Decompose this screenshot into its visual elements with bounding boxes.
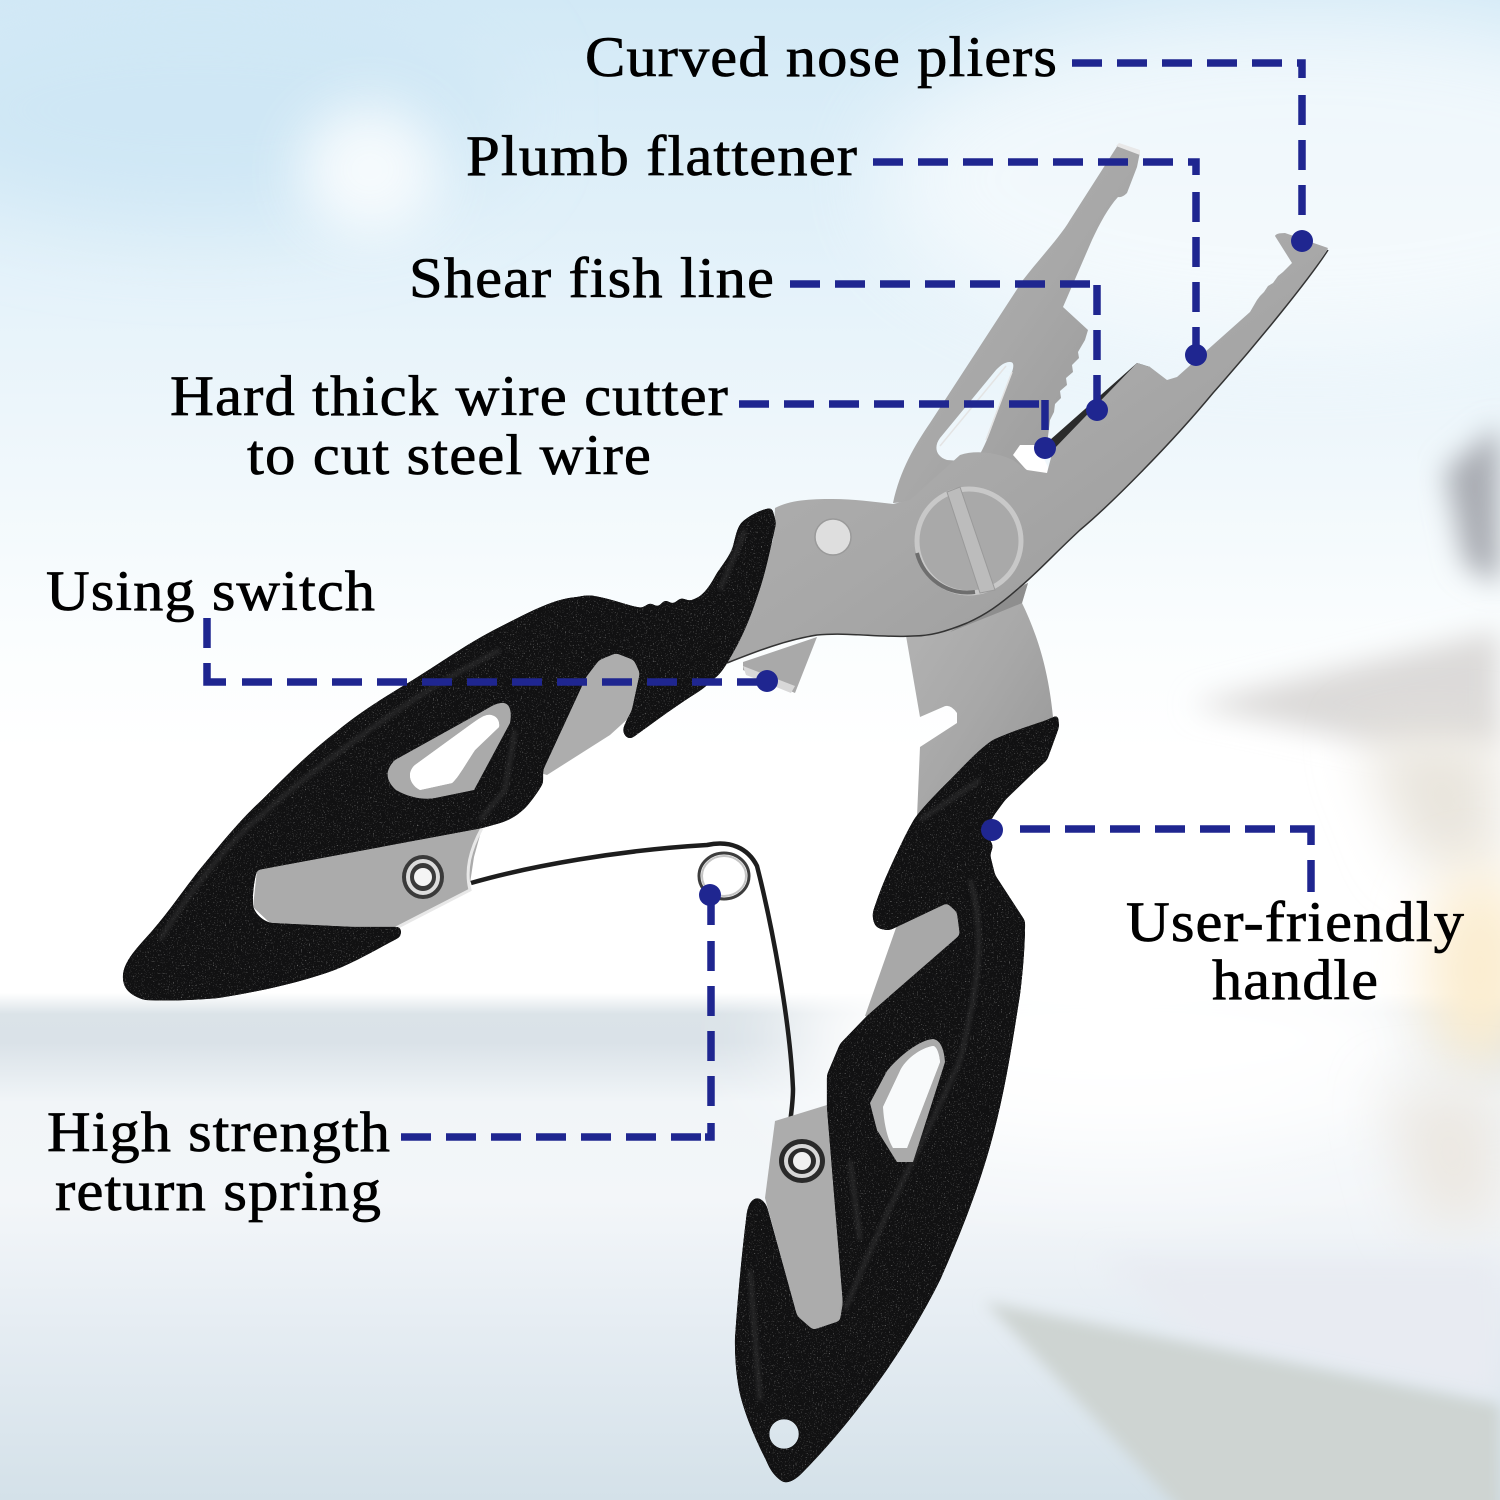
switch light edge xyxy=(743,666,795,693)
lower steel arm xyxy=(905,583,1053,817)
callout: High strength return spring: High strength xyxy=(47,1101,391,1164)
right handle grip highlights xyxy=(750,780,980,1400)
callout: Hard thick wire cutter: Hard thick wire cutter xyxy=(170,365,729,428)
hole highlight in upper jaw xyxy=(940,366,1012,446)
callout: User-friendly handle xyxy=(981,819,1465,1012)
callout: Hard thick wire cutter: to cut steel wire xyxy=(247,424,652,487)
right handle steel: mid section xyxy=(865,903,960,1020)
callout: Plumb flattener xyxy=(466,125,1207,366)
callout: Curved nose pliers: Curved nose pliers xyxy=(585,26,1058,89)
callout: Using switch: Using switch xyxy=(46,560,376,623)
small pivot gap xyxy=(1013,445,1048,474)
callout: User-friendly handle: handle xyxy=(1212,949,1379,1012)
lower steel shadow at pivot xyxy=(950,583,1028,632)
wire cutter dark blade xyxy=(1050,363,1150,455)
left handle rear steel xyxy=(253,828,482,929)
left handle rear steel light edge xyxy=(396,828,482,928)
left handle hole lining xyxy=(388,703,511,799)
callout: User-friendly handle: User-friendly xyxy=(1126,891,1465,954)
right handle xyxy=(735,715,1059,1482)
main blade lower dark edge xyxy=(727,250,1328,663)
right eyelet xyxy=(779,1139,825,1183)
callout: Plumb flattener: Plumb flattener xyxy=(466,125,858,188)
callout: Hard thick wire cutter xyxy=(170,365,1056,487)
callout: Shear fish line: Shear fish line xyxy=(409,247,775,310)
left handle grip highlights xyxy=(160,530,745,940)
right handle steel: lower section xyxy=(765,1105,843,1330)
switch slider xyxy=(743,637,817,693)
upper jaw tip highlight xyxy=(1116,143,1140,155)
right handle hole opening xyxy=(883,1046,940,1148)
main blade and left arm xyxy=(727,233,1328,663)
pivot screw xyxy=(917,487,1021,593)
rivet xyxy=(815,519,851,555)
left eyelet xyxy=(402,855,444,899)
right handle hole lining xyxy=(870,1039,945,1162)
left handle slot steel xyxy=(530,653,640,775)
callout: High strength return spring xyxy=(47,884,721,1223)
return spring xyxy=(471,844,803,1176)
left handle xyxy=(123,508,776,1000)
callout: High strength return spring: return spring xyxy=(55,1160,382,1223)
upper jaw blade with serrated edge xyxy=(893,145,1140,503)
left handle hole opening xyxy=(410,715,499,790)
callout: Using switch xyxy=(46,560,778,692)
callout: Curved nose pliers xyxy=(585,26,1313,252)
pliers xyxy=(123,143,1328,1482)
callout: Shear fish line xyxy=(409,247,1108,421)
